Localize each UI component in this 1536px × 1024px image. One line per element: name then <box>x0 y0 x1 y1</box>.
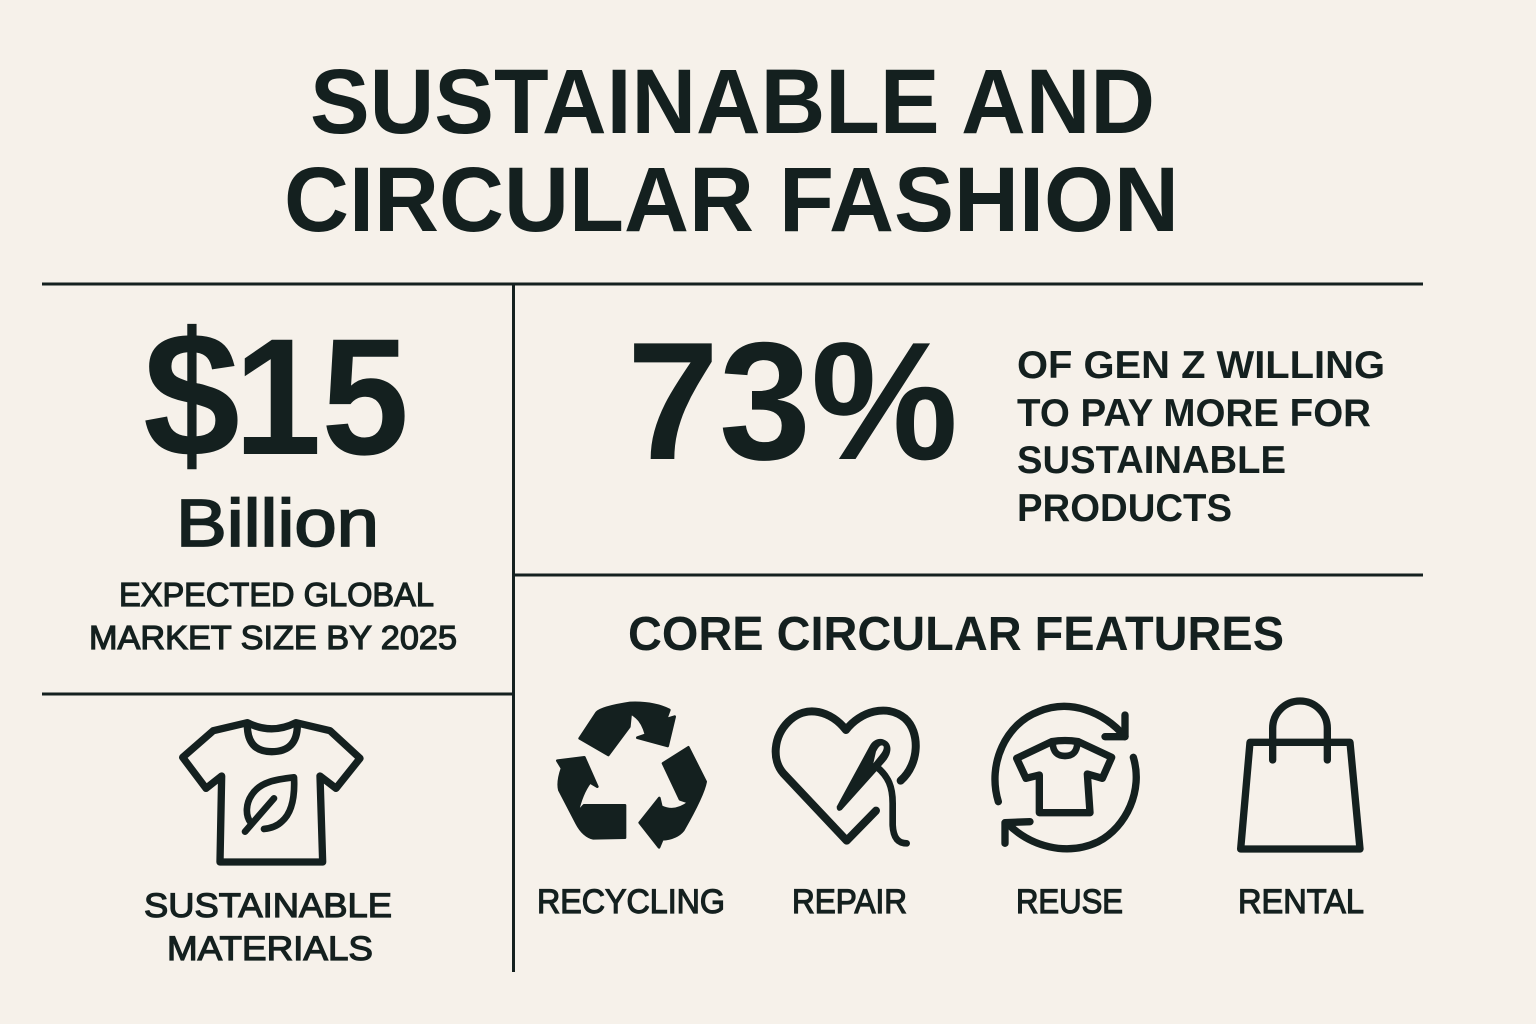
title <box>284 51 1179 251</box>
gen z description: OF GEN Z WILLING <box>1017 344 1385 387</box>
gen z description: PRODUCTS <box>1017 487 1232 530</box>
features heading: CORE CIRCULAR FEATURES <box>628 608 1284 661</box>
panel: gen z statistic <box>627 307 1385 530</box>
feature labels: REPAIR <box>792 883 907 921</box>
market size unit: Billion <box>176 486 379 561</box>
icon: recycling <box>557 703 706 847</box>
title: CIRCULAR FASHION <box>284 149 1179 251</box>
icon: rental shopping bag <box>1241 701 1360 849</box>
market size description <box>89 576 457 656</box>
gen z description: TO PAY MORE FOR <box>1017 392 1371 435</box>
title: SUSTAINABLE AND <box>310 51 1155 153</box>
materials label: MATERIALS <box>167 930 373 968</box>
panel: sustainable materials <box>144 723 392 968</box>
materials label <box>144 887 392 968</box>
market size description: MARKET SIZE BY 2025 <box>89 619 457 656</box>
feature labels: REUSE <box>1016 883 1123 921</box>
market size figure <box>143 295 409 494</box>
icon: t-shirt with leaf <box>183 723 360 862</box>
icon: reuse cycle with shirt <box>995 706 1136 849</box>
materials label: SUSTAINABLE <box>144 887 392 925</box>
gen z description: SUSTAINABLE <box>1017 439 1286 482</box>
gen z percentage: 73% <box>627 307 958 495</box>
gen z description <box>1017 344 1385 530</box>
icon: repair heart and needle <box>776 711 916 843</box>
market size description: EXPECTED GLOBAL <box>119 576 434 613</box>
feature labels: RECYCLING <box>537 883 725 921</box>
panel: market size <box>89 295 457 656</box>
market size figure: $ <box>143 295 240 494</box>
feature labels: RENTAL <box>1238 883 1364 921</box>
market size figure: 15 <box>234 305 409 490</box>
feature labels <box>537 883 1364 921</box>
panel: core circular features <box>537 608 1364 921</box>
